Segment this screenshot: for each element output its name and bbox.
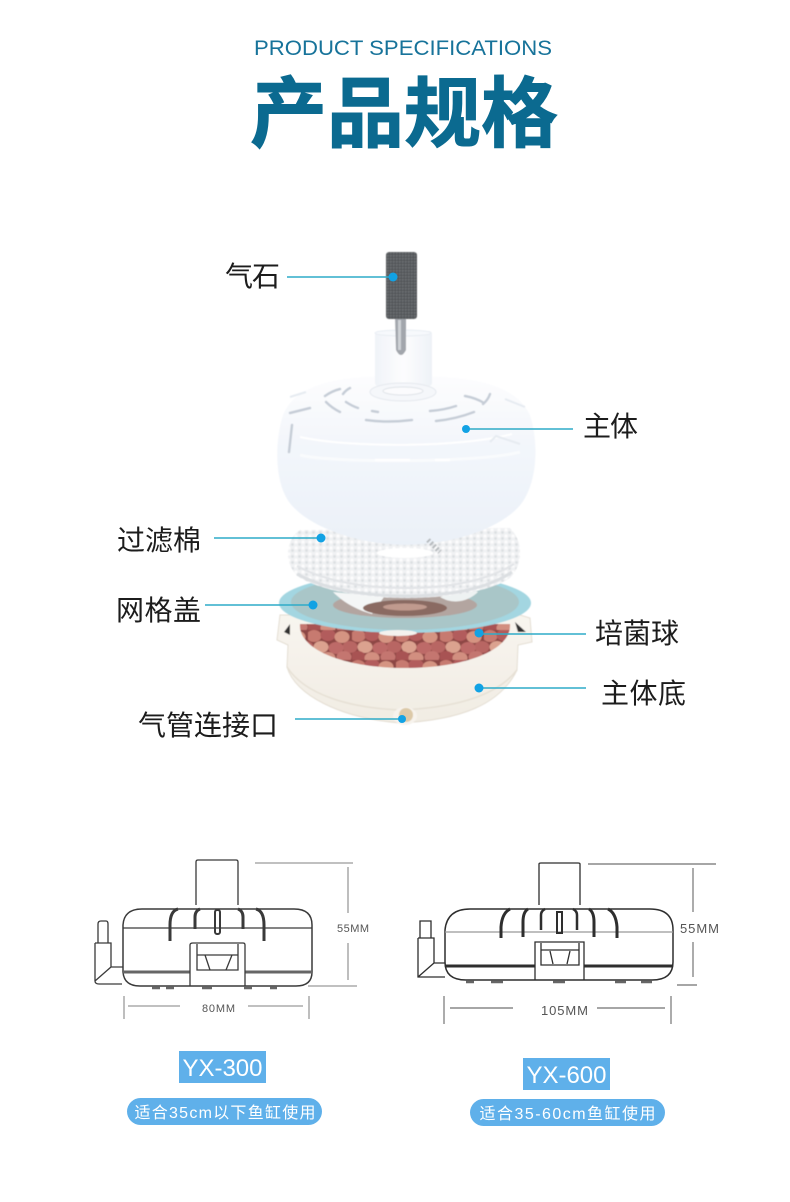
callout: air tube port bbox=[138, 710, 406, 741]
callout: filter sponge bbox=[117, 525, 326, 556]
callout: base: 主体底 bbox=[601, 678, 686, 709]
part: filter sponge bbox=[288, 528, 520, 598]
dimensions: YX-300: 80MM bbox=[202, 1003, 235, 1015]
part: mesh lid bbox=[279, 573, 531, 636]
callout: air stone bbox=[225, 261, 398, 292]
dimensions: YX-600: 105MM bbox=[541, 1003, 588, 1018]
callout: mesh lid bbox=[116, 595, 318, 626]
callout: main body bbox=[462, 411, 638, 442]
part: air stone bbox=[386, 252, 417, 355]
callout: air tube port: 气管连接口 bbox=[138, 710, 278, 741]
callout: air stone: 气石 bbox=[225, 261, 280, 292]
title: product specifications english: PRODUCT SPECIFICATIONS bbox=[254, 37, 552, 60]
dimensions: YX-600: 55MM bbox=[680, 921, 719, 936]
diagram: YX-600 outline bbox=[418, 863, 673, 982]
part: transparent main body bbox=[277, 330, 535, 545]
callout: main body: 主体 bbox=[583, 411, 638, 442]
dimensions: YX-600 bbox=[444, 864, 719, 1024]
callout: base bbox=[474, 678, 686, 709]
callout: mesh lid: 网格盖 bbox=[116, 595, 201, 626]
product exploded view bbox=[277, 252, 535, 725]
part: sponge centre hole bbox=[377, 540, 440, 558]
badge: YX-300: YX-300 bbox=[182, 1055, 262, 1082]
dimensions: YX-300: 55MM bbox=[337, 923, 369, 935]
title: chinese heading: 产品规格 bbox=[250, 72, 558, 158]
callout: bio balls: 培菌球 bbox=[595, 618, 679, 649]
callout: filter sponge: 过滤棉 bbox=[117, 525, 201, 556]
pill: YX-300 usage bbox=[127, 1098, 322, 1125]
badge: YX-600: YX-600 bbox=[526, 1062, 606, 1089]
callout: bio balls bbox=[474, 618, 679, 649]
pill: YX-600 usage bbox=[470, 1099, 665, 1126]
part: bio balls bbox=[300, 624, 510, 668]
dimensions: YX-300 bbox=[124, 863, 369, 1019]
pill: YX-300 usage: 适合35cm以下鱼缸使用 bbox=[134, 1103, 316, 1122]
diagram: YX-300 outline bbox=[95, 860, 312, 988]
part: base tray bbox=[277, 615, 532, 725]
pill: YX-600 usage: 适合35-60cm鱼缸使用 bbox=[480, 1104, 656, 1123]
